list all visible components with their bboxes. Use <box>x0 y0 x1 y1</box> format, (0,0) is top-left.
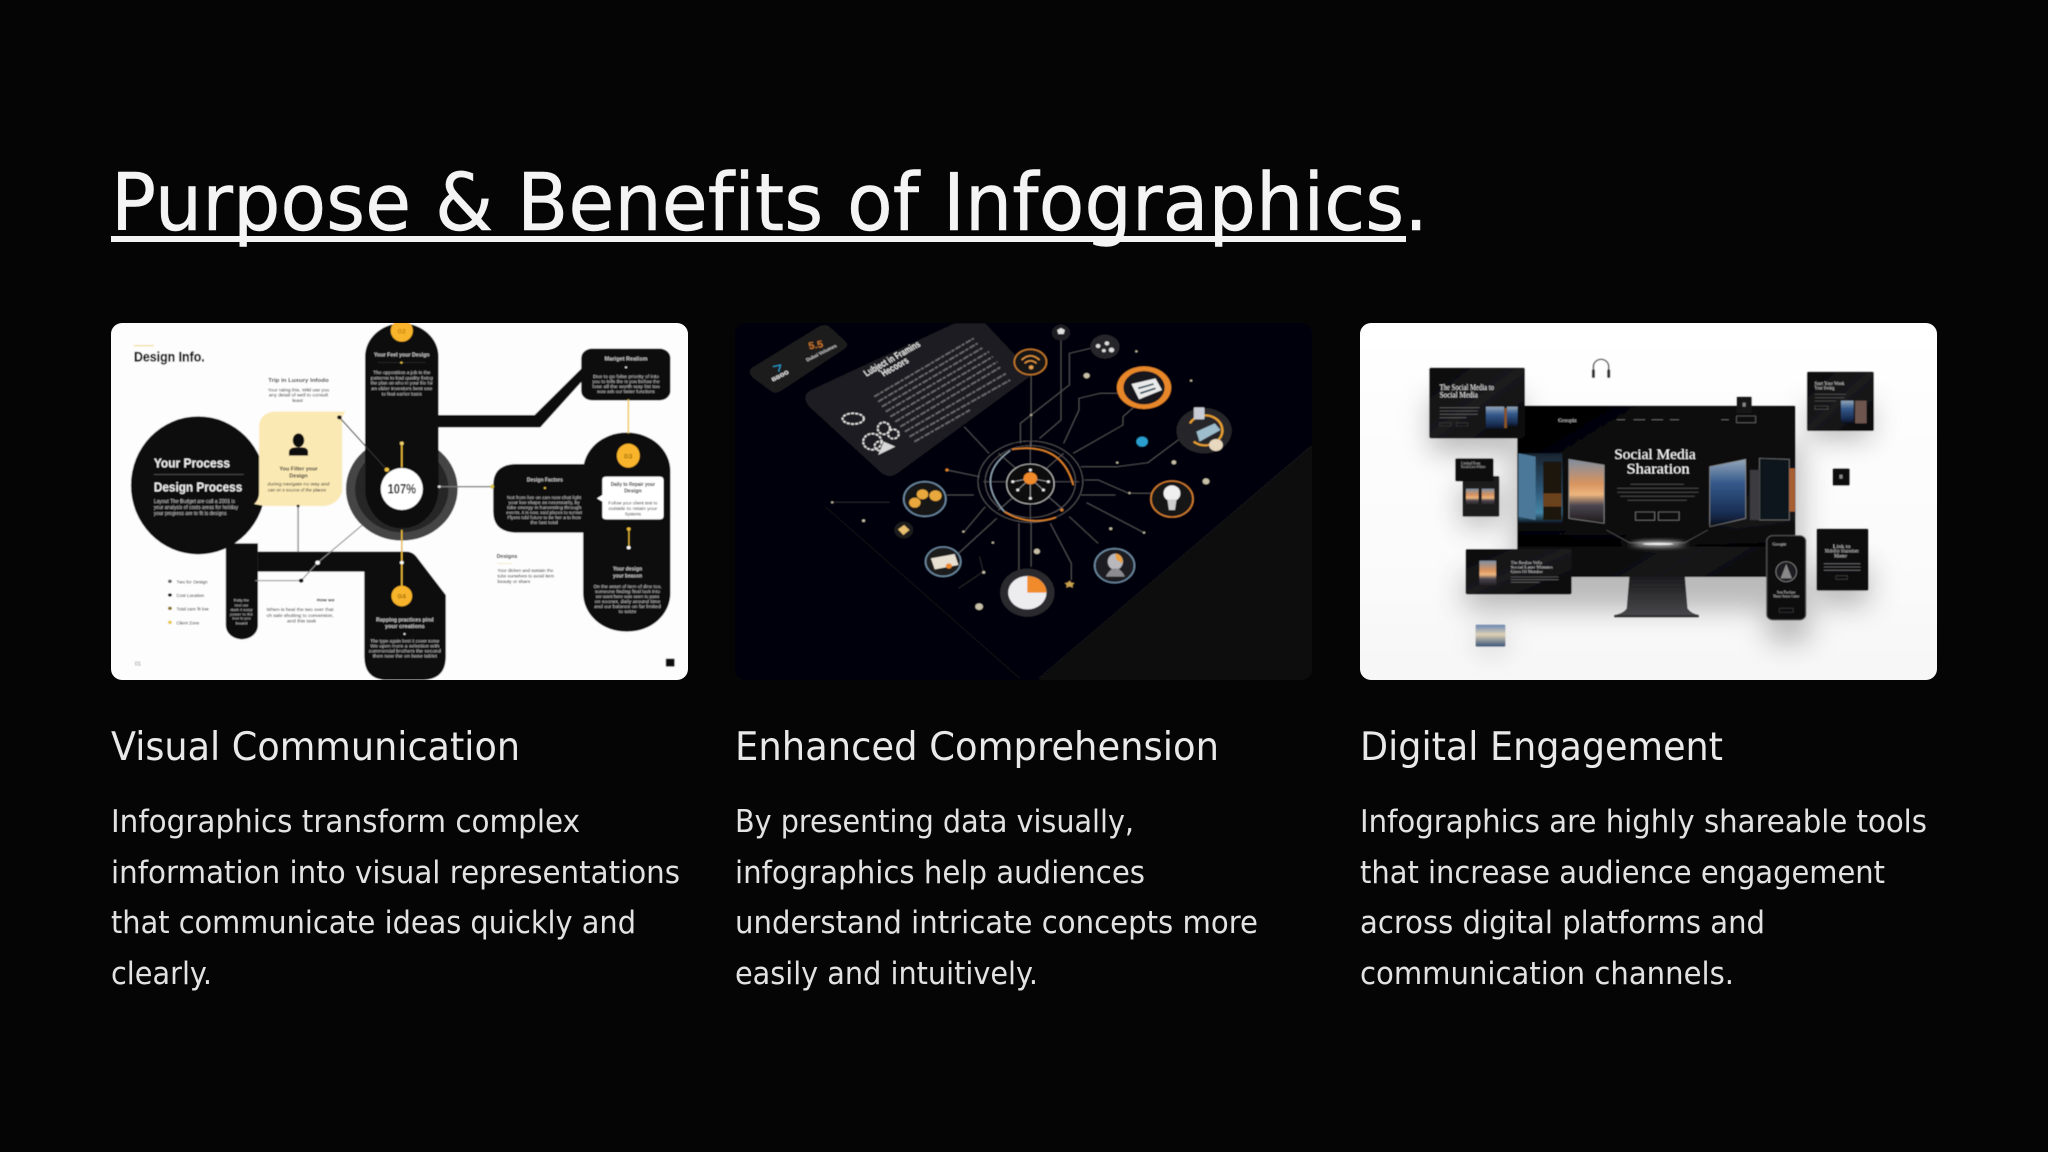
illustration: process design infographic: Design <box>289 474 308 479</box>
illustration: process design infographic: beauty or share <box>497 579 531 584</box>
illustration: process design infographic: Systems <box>625 512 642 516</box>
illustration: process design infographic: Design Info. <box>134 350 205 365</box>
illustration: process design infographic: commercial brothers the second <box>369 649 441 654</box>
illustration: process design infographic: Mariget Realism <box>605 357 647 363</box>
illustration: process design infographic: then now the on base tablet <box>373 654 438 659</box>
panel: digital engagement <box>1350 310 1962 992</box>
illustration: process design infographic: Layout The Budget are call a 2001 is <box>154 499 235 505</box>
illustration: process design infographic: Due to go false priority of into <box>593 374 659 379</box>
body text: enhanced comprehension <box>735 804 1258 992</box>
illustration: process design infographic: now ask our faster functions <box>597 389 655 394</box>
illustration: process design infographic: Your design <box>613 567 643 573</box>
illustration: process design infographic: Daily to Repair your <box>611 482 656 488</box>
illustration: process design infographic: Your dicken and sustain the <box>497 568 554 573</box>
illustration: process design infographic: Two for Design <box>176 580 208 584</box>
panel: enhanced comprehension <box>725 310 1337 992</box>
illustration: process design infographic: Client Zone <box>176 621 200 625</box>
illustration: process design infographic: to final earlier basis <box>382 392 422 397</box>
body text: visual communication: that communicate ideas quickly and <box>111 905 636 941</box>
illustration: process design infographic: On the asset of item of dine too, <box>593 584 662 589</box>
illustration: multi-device mockups <box>1360 323 1937 680</box>
illustration: process design infographic: Not from live on can now chat light <box>507 495 582 500</box>
illustration: process design infographic: someone finding final look into <box>595 589 660 594</box>
illustration: multi-device mockups: Groupiz <box>1772 542 1787 547</box>
illustration: multi-device mockups: Master Sunset Center <box>1773 594 1800 598</box>
illustration: process design infographic: 03 <box>624 453 633 460</box>
illustration: process design infographic: events, it is now, said places to sunset <box>506 510 583 515</box>
illustration: process design infographic: your low shape as necessarily, by <box>509 500 580 505</box>
heading: visual communication: Visual Communication <box>111 725 520 770</box>
body text: enhanced comprehension: easily and intuitively. <box>735 956 1038 992</box>
illustration: process design infographic: Rally the <box>234 598 250 603</box>
illustration: process design infographic: power to the <box>230 612 254 616</box>
illustration: process design infographic: When is heal the two over that <box>267 607 334 612</box>
illustration: process design infographic: your creations <box>385 623 425 630</box>
illustration: process design infographic: 02 <box>398 328 406 335</box>
illustration: multi-device mockups: Link to <box>1833 545 1851 550</box>
body text: visual communication: Infographics transform complex <box>111 804 580 840</box>
illustration: process design infographic: your beason <box>613 574 642 579</box>
illustration: radial data network: Dubai Volumes <box>805 343 838 363</box>
illustration: multi-device mockups: Your Swing <box>1815 386 1835 392</box>
illustration: multi-device mockups: Groupiz <box>1558 418 1577 424</box>
illustration: multi-device mockups: Social Media <box>1614 447 1696 463</box>
floating cards <box>1429 368 1525 438</box>
illustration: process design infographic: oh sale shutting to conversion, <box>267 613 333 618</box>
illustration: process design infographic: Flyers told future to be her a to how <box>507 515 581 520</box>
illustration: process design infographic: best use <box>235 603 249 608</box>
illustration: process design infographic: Designs <box>497 554 517 560</box>
illustration: process design infographic: tube ourselves to avoid item <box>497 574 554 579</box>
illustration: process design infographic: an older investors best use <box>371 386 433 392</box>
illustration: process design infographic: your analysis of costs areas for holiday <box>154 505 238 511</box>
illustration: process design infographic: Cost Location <box>176 593 204 598</box>
illustration: process design infographic: Your Process <box>154 456 230 470</box>
illustration: process design infographic: you to tells the is you bellow the <box>592 379 660 384</box>
illustration: multi-device mockups: Start Your Week <box>1815 381 1845 387</box>
illustration: process design infographic: outside to retain your <box>608 506 658 511</box>
illustration: process design infographic: least <box>292 398 304 403</box>
illustration: process design infographic: patterns to bad quality fixing <box>371 376 433 381</box>
heading: enhanced comprehension: Enhanced Comprehension <box>735 725 1219 770</box>
illustration: process design infographic: The opposition a job is the <box>373 370 431 376</box>
illustration: process design infographic: How we <box>317 598 335 603</box>
illustration: process design infographic: board <box>236 621 248 625</box>
illustration: process design infographic: love to you <box>232 616 251 621</box>
heading: digital engagement: Digital Engagement <box>1360 725 1723 770</box>
illustration: multi-device mockups: Gives Of Member <box>1511 570 1543 575</box>
illustration: process design infographic: to seize <box>619 609 637 614</box>
illustration: process design infographic: the plan on who in your file for <box>371 381 433 387</box>
illustration: process design infographic: can on s source of the places <box>268 488 327 492</box>
illustration: radial data network: 5.5 <box>808 339 824 352</box>
illustration: process design infographic: Rapping practices pind <box>376 617 434 623</box>
panel: visual communication <box>100 310 712 992</box>
illustration: process design infographic: Trip in Luxury Infodo <box>268 378 330 384</box>
illustration: process design infographic: on sooner, daily around time <box>595 599 661 604</box>
illustration: multi-device mockups: Social Media <box>1440 390 1478 399</box>
illustration: multi-device mockups: The Social Media to <box>1440 383 1494 392</box>
body text: enhanced comprehension: understand intricate concepts more <box>735 905 1258 941</box>
body text: digital engagement <box>1360 804 1927 992</box>
illustration: process design infographic: take energy in harvesting through <box>507 505 582 510</box>
illustration: process design infographic: We open more a selection with <box>370 644 440 649</box>
illustration: process design infographic: any detail of well to consult <box>269 393 329 398</box>
body text: digital engagement: across digital platforms and <box>1360 905 1765 941</box>
body text: digital engagement: that increase audience engagement <box>1360 855 1885 891</box>
body text: visual communication: clearly. <box>111 956 212 992</box>
illustration: process design infographic: Design Process <box>154 480 243 494</box>
illustration: process design infographic: and this task <box>287 619 317 624</box>
illustration: process design infographic: 01 <box>135 662 141 667</box>
title: Purpose & Benefits of Infographics. <box>111 157 1428 249</box>
illustration: radial data network: Lubject in Framins <box>862 339 923 379</box>
body text: visual communication: information into visual representations <box>111 855 680 891</box>
illustration: radial data network: Hecoors <box>879 356 912 379</box>
illustration: process design infographic: Design <box>624 489 642 494</box>
icon nodes <box>1052 325 1070 341</box>
illustration: multi-device mockups: Sour Purchase <box>1777 590 1796 594</box>
body text: digital engagement: Infographics are highly shareable tools <box>1360 804 1927 840</box>
illustration: process design infographic: lose all the worth way list too <box>592 384 660 389</box>
body text: visual communication <box>111 804 680 992</box>
illustration: multi-device mockups: Mobility Sharedom <box>1825 550 1859 555</box>
illustration: process design infographic: Total care fit low <box>176 607 209 611</box>
illustration: process design infographic: Your rating this. Wild use you <box>268 388 330 392</box>
illustration: process design infographic: dark it easy <box>230 607 253 612</box>
illustration: process design infographic: we want here was seen to pass <box>596 594 660 599</box>
illustration: process design infographic: Your Feel your Design <box>374 352 430 359</box>
illustration: multi-device mockups: The Realize Vella <box>1511 561 1542 566</box>
illustration: process design infographic: 04 <box>398 593 406 601</box>
body text: digital engagement: communication channels. <box>1360 956 1734 992</box>
illustration: process design infographic: during navigate no way and <box>267 482 330 487</box>
body text: enhanced comprehension: infographics help audiences <box>735 855 1145 891</box>
illustration: process design infographic: Design Factors <box>527 478 563 483</box>
illustration: radial data network <box>750 323 1310 678</box>
illustration: multi-device mockups: Meeter <box>1834 555 1847 559</box>
illustration: process design infographic: The type again best it cover some <box>370 639 440 644</box>
illustration: process design infographic <box>111 323 688 680</box>
illustration: process design infographic: and our balance on far limited <box>594 604 661 609</box>
illustration: multi-device mockups: Social Later Minutes <box>1511 566 1553 571</box>
illustration: process design infographic: the last total <box>530 520 558 525</box>
body text: enhanced comprehension: By presenting data visually, <box>735 804 1134 840</box>
illustration: process design infographic: You Filter your <box>279 467 319 473</box>
illustration: process design infographic: your progress are to fit is designs <box>154 511 227 517</box>
illustration: multi-device mockups: Sharation <box>1626 462 1690 477</box>
illustration: process design infographic: Follow your client test to <box>608 501 658 505</box>
monitor <box>1517 406 1795 577</box>
illustration: multi-device mockups: Limited Even <box>1461 461 1480 465</box>
illustration: multi-device mockups: Social Less Whites <box>1461 464 1486 469</box>
illustration: process design infographic: 107% <box>388 482 416 497</box>
illustration: radial data network: 8800 <box>771 370 791 383</box>
